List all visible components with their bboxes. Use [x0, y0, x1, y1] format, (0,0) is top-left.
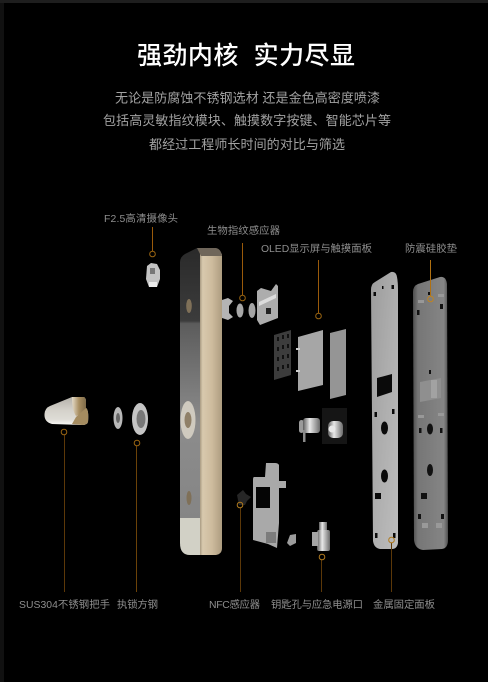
callout: OLED and touch panel — [261, 242, 373, 444]
callout: metal fixing plate — [371, 272, 436, 611]
title: 强劲内核 实力尽显 — [137, 42, 355, 70]
lock bracket parts — [253, 463, 296, 548]
callout: metal fixing plate: 金属固定面板 — [373, 598, 436, 611]
intro text — [103, 90, 391, 152]
callout: camera — [104, 212, 178, 287]
callout: anti-shock silicone pad: 防震硅胶垫 — [405, 242, 458, 255]
intro text: 包括高灵敏指纹模块、触摸数字按键、智能芯片等 — [103, 113, 391, 128]
callout: camera: F2.5高清摄像头 — [104, 212, 178, 225]
intro text: 都经过工程师长时间的对比与筛选 — [149, 137, 345, 152]
callout: keyhole and emergency power port: 钥匙孔与应急电源口 — [271, 598, 363, 611]
callout: anti-shock silicone pad — [405, 242, 458, 550]
callout: NFC sensor: NFC感应器 — [209, 598, 261, 611]
callout: NFC sensor — [209, 490, 261, 611]
keypad panel — [274, 330, 291, 380]
intro text: 无论是防腐蚀不锈钢选材 还是金色高密度喷漆 — [115, 90, 380, 106]
callout: square steel spindle: 执锁方钢 — [117, 598, 158, 611]
callout: fingerprint sensor: 生物指纹感应器 — [207, 224, 281, 237]
callout: OLED and touch panel: OLED显示屏与触摸面板 — [261, 242, 373, 255]
callout: keyhole and emergency power port — [271, 522, 363, 611]
lock body — [180, 248, 222, 555]
callout: fingerprint sensor — [207, 224, 281, 325]
callout: stainless steel handle — [19, 397, 110, 611]
callout: stainless steel handle: SUS304不锈钢把手 — [19, 598, 110, 611]
callout: square steel spindle — [114, 403, 158, 611]
